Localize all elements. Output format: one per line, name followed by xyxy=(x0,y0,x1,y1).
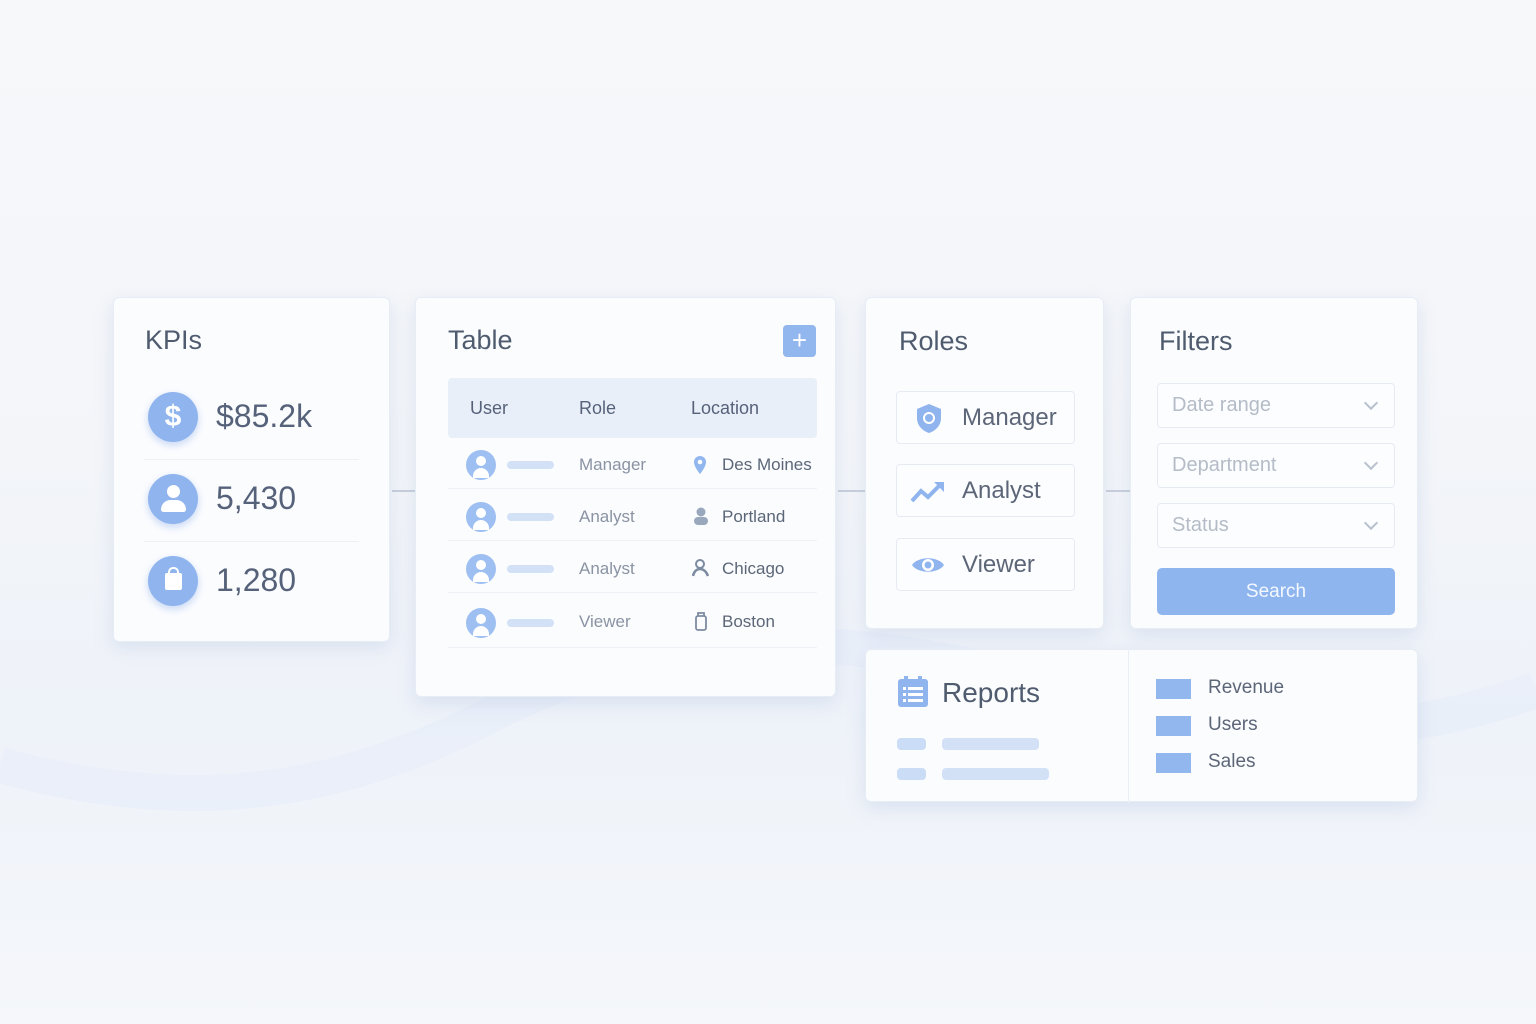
kpi: revenue: $85.2k xyxy=(216,398,312,434)
role: Viewer xyxy=(896,538,1075,591)
kpi: orders xyxy=(144,556,296,612)
heading: KPIs: KPIs xyxy=(145,325,202,355)
heading: Table: Table xyxy=(448,325,513,355)
role: Analyst xyxy=(896,464,1075,517)
panel: Reports xyxy=(865,649,1418,802)
dropdown: Status: Status xyxy=(1172,514,1229,536)
button: Search: Search xyxy=(1246,581,1306,602)
dropdown: Date range xyxy=(1157,383,1395,428)
table header xyxy=(448,378,817,438)
kpi: revenue: $ xyxy=(165,400,181,433)
row: Viewer / Boston xyxy=(448,600,817,648)
button: Search xyxy=(1157,568,1395,615)
row: Manager / Des Moines: Manager xyxy=(579,455,646,474)
arrow: Roles to Filters xyxy=(1106,490,1136,492)
kpi: revenue xyxy=(144,392,312,448)
panel: Roles xyxy=(865,297,1104,629)
legend: Users xyxy=(1208,714,1258,735)
row: Analyst / Chicago xyxy=(448,547,817,593)
row: Analyst / Portland: Portland xyxy=(722,507,785,526)
kpi: users: 5,430 xyxy=(216,480,296,516)
row: Analyst / Chicago: Analyst xyxy=(579,559,635,578)
panel: Table xyxy=(415,297,836,697)
heading: Reports: Reports xyxy=(942,677,1040,708)
row: Viewer / Boston: Boston xyxy=(722,612,775,631)
dropdown: Department: Department xyxy=(1172,454,1276,476)
kpi: orders: 1,280 xyxy=(216,562,296,598)
button: add xyxy=(783,325,816,357)
heading: Roles: Roles xyxy=(899,326,968,356)
table header: Role xyxy=(579,398,616,418)
legend: Sales xyxy=(1208,751,1256,772)
placeholder lines xyxy=(897,738,1049,780)
row: Analyst / Chicago: Chicago xyxy=(722,559,784,578)
button: add: + xyxy=(792,325,807,355)
dropdown: Department xyxy=(1157,443,1395,488)
role: Manager xyxy=(896,391,1075,444)
dropdown: Status xyxy=(1157,503,1395,548)
arrow: Table to Roles xyxy=(838,490,871,492)
dropdown: Date range: Date range xyxy=(1172,394,1271,416)
panel: Filters xyxy=(1130,297,1418,629)
legend: Revenue xyxy=(1208,677,1284,698)
table header: Location xyxy=(691,398,759,418)
table header: User xyxy=(470,398,508,418)
icon: reports clipboard xyxy=(898,676,928,707)
role: Viewer: Viewer xyxy=(962,551,1035,578)
heading: Filters: Filters xyxy=(1159,326,1232,356)
kpi: users xyxy=(144,474,296,530)
row: Viewer / Boston: Viewer xyxy=(579,612,631,631)
row: Manager / Des Moines xyxy=(448,443,817,489)
row: Manager / Des Moines: Des Moines xyxy=(722,455,812,474)
panel: KPIs xyxy=(113,297,390,642)
role: Analyst: Analyst xyxy=(962,477,1041,504)
role: Manager: Manager xyxy=(962,404,1057,431)
legend xyxy=(1156,677,1284,773)
arrow: KPIs to Table xyxy=(392,490,422,492)
row: Analyst / Portland: Analyst xyxy=(579,507,635,526)
row: Analyst / Portland xyxy=(448,495,817,541)
